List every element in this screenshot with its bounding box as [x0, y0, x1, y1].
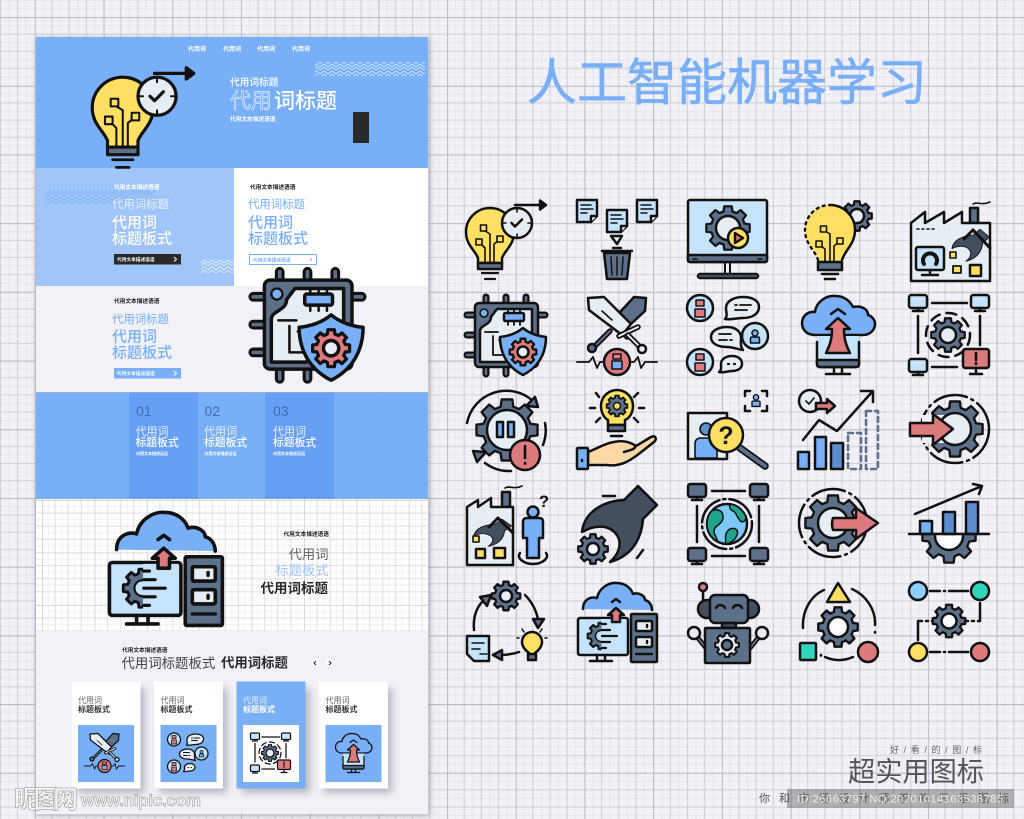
text block: 代用词	[112, 328, 157, 346]
icon: bulb with gear	[805, 201, 872, 279]
dark block	[353, 112, 369, 143]
icon: chat people	[687, 295, 768, 375]
icon: node gear	[909, 582, 989, 661]
text block	[112, 183, 172, 248]
text block: 代用词	[289, 547, 328, 562]
icon: gear pause alert	[467, 391, 546, 471]
icon: cloud computer	[578, 583, 657, 662]
column 02	[198, 392, 265, 499]
column 03	[265, 392, 334, 499]
text block: 代用词	[112, 214, 157, 232]
site watermark: www.nipic.com	[80, 791, 201, 810]
icon: chat people	[168, 733, 208, 773]
card 2: 代用词	[160, 695, 184, 705]
column 02: 代用文本描述语语	[204, 450, 236, 456]
text block: 代用文本描述语语	[114, 297, 160, 305]
site watermark	[14, 786, 201, 814]
card 2	[154, 682, 223, 788]
icon: chip shield	[467, 297, 546, 375]
nav links: 代用词	[292, 45, 310, 53]
hero heading: 代用词标题	[230, 76, 279, 88]
zigzag decoration	[315, 62, 425, 76]
nav links	[188, 45, 310, 53]
card 1: 代用词	[78, 695, 102, 705]
column 01: 01	[136, 403, 152, 419]
icon: question magnifier	[688, 391, 767, 466]
icon: wrench and gear	[578, 486, 657, 564]
title: 人工智能机器学习	[527, 55, 927, 111]
column 02: 标题板式	[204, 435, 247, 449]
icon: gear cycle	[467, 582, 547, 661]
panel: grid section	[36, 499, 428, 631]
panel: card gallery	[36, 631, 428, 814]
icon: crossed swords	[84, 734, 124, 772]
panel: grey feature	[36, 286, 428, 392]
nav links: 代用词	[257, 45, 275, 53]
text block: 代用词标题	[112, 198, 169, 211]
text block: 标题板式	[248, 230, 308, 248]
panel icon: chip with shield	[253, 272, 363, 380]
icon: network gear	[909, 295, 989, 375]
panel: light blue feature	[36, 168, 234, 286]
panel: hero banner	[36, 37, 428, 168]
zigzag decoration	[201, 259, 234, 273]
gallery heading: 代用词标题板式	[122, 656, 215, 671]
card 4	[319, 682, 388, 788]
watermark band: ID:26663797 NO:20201014163538785	[797, 794, 1003, 806]
icon: crossed swords	[577, 297, 657, 375]
card 3: 标题板式	[243, 704, 275, 714]
carousel arrows	[311, 659, 334, 667]
icon: gear arrow out	[799, 489, 878, 557]
button: 代用文本描述语语	[117, 256, 155, 263]
hero heading: 代用文本描述语语	[230, 115, 276, 123]
text block: 代用文本描述语语	[114, 183, 160, 191]
card 4: 代用词	[326, 695, 350, 705]
hero heading: 词标题	[274, 90, 337, 113]
icon: robot	[688, 583, 768, 663]
icon: factory	[911, 202, 990, 281]
icon grid	[466, 200, 990, 663]
text block: 代用文本描述语语	[284, 530, 329, 538]
button	[114, 368, 181, 378]
icon: arrow into gear	[910, 395, 989, 463]
caption block: 超实用图标	[848, 756, 984, 787]
column 03: 代用词	[273, 425, 306, 438]
text block	[112, 297, 172, 362]
text block: 代用词标题	[260, 581, 328, 596]
card 1	[72, 682, 140, 788]
text block	[260, 530, 329, 596]
icon: shapes around gear	[800, 583, 878, 662]
column 02: 代用词	[204, 425, 237, 438]
column 01	[129, 392, 198, 499]
icon: growth chart	[798, 390, 878, 469]
column 03: 03	[273, 403, 289, 419]
hero heading: 代用	[230, 90, 272, 113]
zigzag decoration	[45, 190, 155, 204]
icon: cloud upload	[802, 296, 875, 374]
icon: monitor with gear	[688, 200, 767, 276]
column 03: 标题板式	[273, 435, 316, 449]
panel icon: cloud computer	[109, 512, 222, 625]
text block: 代用词	[248, 214, 293, 232]
caption block: 你 和 市 场 设 计 师 差 的 只 是 图 标	[759, 791, 1009, 805]
button: 代用文本描述语语	[253, 256, 291, 264]
icon: chart on gear	[909, 484, 989, 563]
card 1: 标题板式	[78, 704, 110, 714]
icon: global network	[688, 484, 768, 564]
text block: 标题板式	[112, 344, 172, 362]
column 01: 代用词	[136, 425, 168, 438]
panel: white feature	[234, 168, 428, 286]
card 3: 代用词	[243, 695, 267, 705]
card shadows	[77, 688, 392, 793]
icon: factory and person	[467, 486, 549, 565]
icon: hand bulb	[577, 390, 656, 469]
card 4: 标题板式	[326, 704, 358, 714]
nav links: 代用词	[188, 45, 206, 53]
column 02: 02	[204, 403, 220, 419]
icon: cloud upload	[336, 733, 372, 772]
button	[114, 254, 181, 264]
panel: numbered columns	[36, 392, 428, 499]
column 03: 代用文本描述语语	[273, 450, 305, 456]
button: 代用文本描述语语	[117, 370, 155, 377]
gallery heading	[122, 646, 289, 671]
text block	[248, 183, 308, 248]
text block: 标题板式	[112, 230, 172, 248]
gallery heading: 代用词标题	[221, 656, 289, 670]
text block: 代用词标题	[112, 313, 169, 326]
text block: 标题板式	[275, 563, 328, 578]
column 01: 代用文本描述语语	[136, 450, 168, 456]
button	[250, 254, 316, 264]
panel icon: hero bulb with clock	[92, 68, 194, 167]
watermark band	[787, 789, 1014, 808]
site watermark: 昵图网	[14, 786, 78, 814]
card 2: 标题板式	[160, 704, 192, 714]
nav links: 代用词	[223, 45, 241, 53]
caption block: 好 / 看 / 的 / 图 / 标	[890, 744, 982, 755]
text block: 代用文本描述语语	[250, 183, 296, 191]
icon: bulb with clock	[466, 200, 546, 279]
icon: network gear	[250, 733, 290, 773]
gallery heading: 代用文本描述语语	[122, 646, 168, 654]
icon: documents and trash	[577, 200, 657, 279]
card 3	[236, 682, 306, 788]
hero heading	[230, 76, 337, 123]
text block: 代用词标题	[248, 198, 305, 211]
column 01: 标题板式	[136, 435, 179, 449]
caption block	[759, 744, 1009, 805]
panel shadow	[36, 38, 430, 816]
